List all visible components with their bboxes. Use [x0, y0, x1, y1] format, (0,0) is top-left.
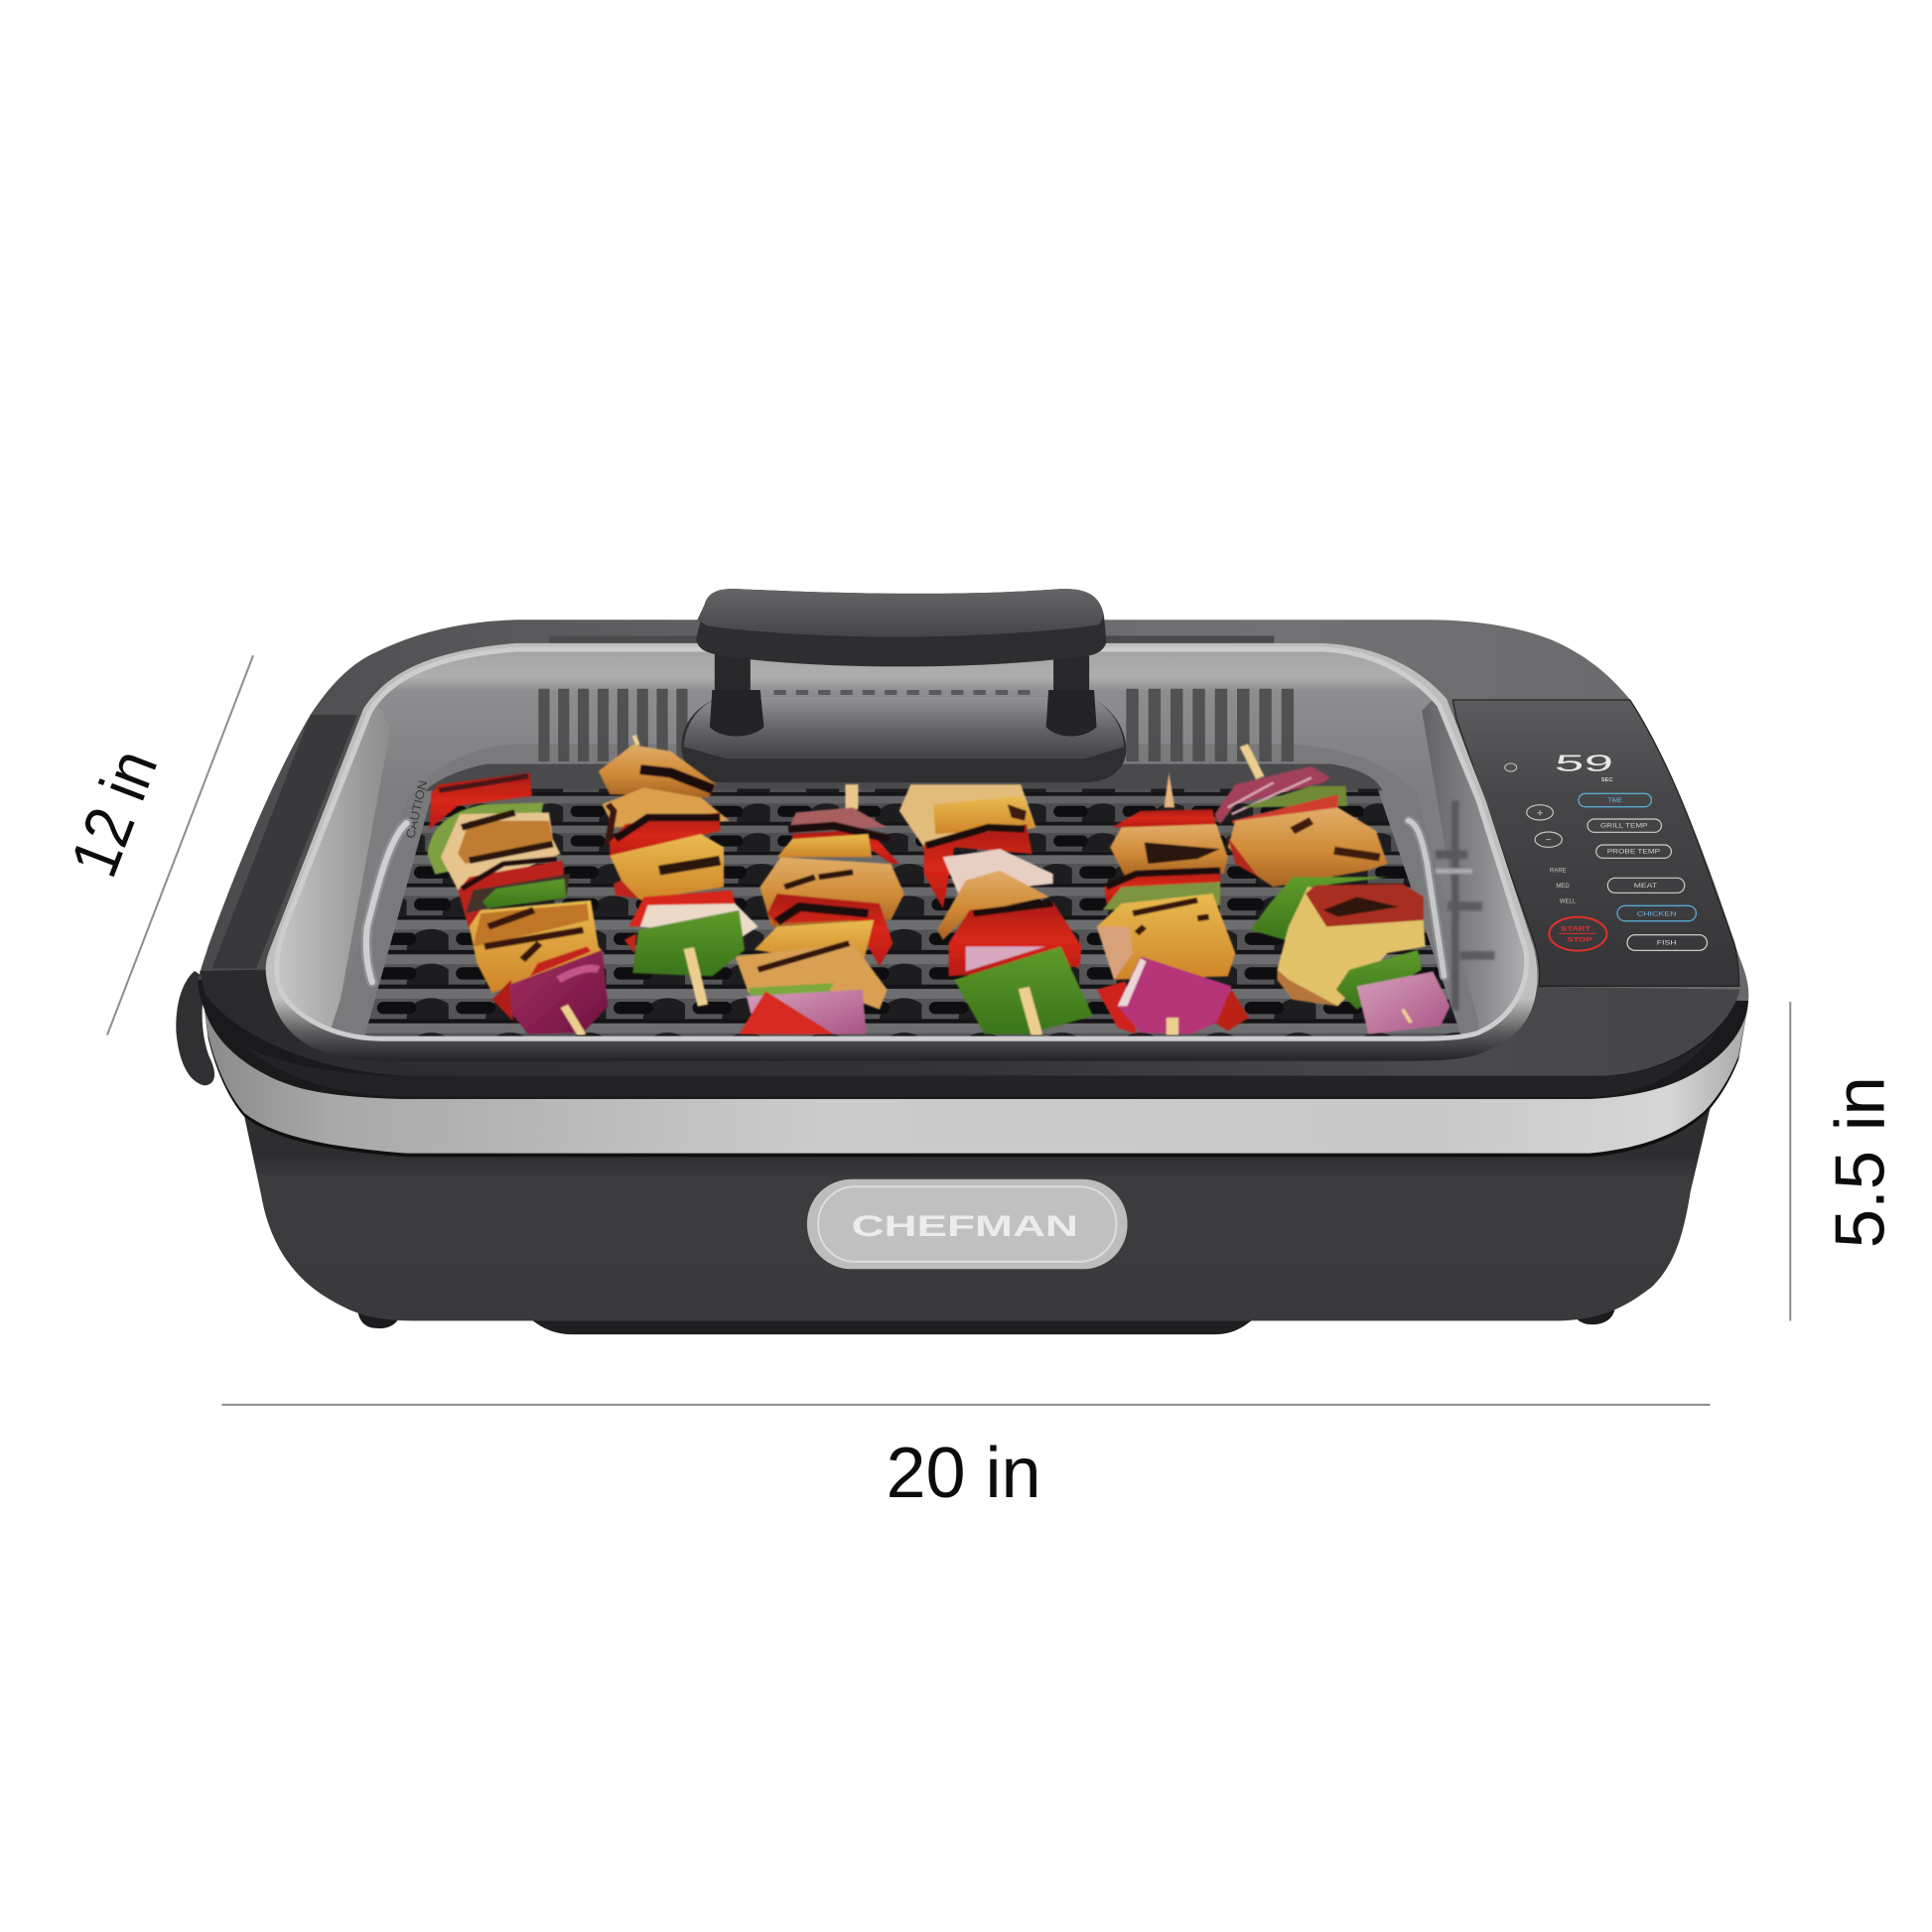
control panel: [1452, 700, 1739, 986]
glass lid outer shell: [266, 643, 1538, 1061]
probe temp button: [1596, 845, 1671, 858]
panel surface: [1452, 700, 1739, 986]
minus button: [1535, 832, 1562, 847]
timer icon: [1505, 763, 1517, 771]
doneness labels: [1550, 869, 1577, 905]
grill tray: [323, 745, 1478, 1059]
display readout: 59: [1554, 750, 1614, 775]
lid handle: [681, 589, 1126, 782]
label: depth 12 in: 12 in: [57, 740, 172, 887]
minus button: −: [1546, 835, 1552, 846]
grill temp button: [1587, 819, 1661, 832]
label: height 5.5 in: 5.5 in: [1821, 1076, 1899, 1248]
chicken button: [1617, 905, 1696, 921]
plus button: +: [1537, 807, 1544, 819]
sec label: SEC: [1601, 777, 1613, 783]
feet: [357, 1307, 1615, 1328]
side handle: [176, 971, 214, 1085]
handle posts: [710, 653, 1097, 737]
brand badge: CHEFMAN: [852, 1210, 1078, 1243]
height dimension line: [1789, 1002, 1791, 1320]
start stop button: [1549, 917, 1606, 951]
doneness labels: WELL: [1560, 899, 1577, 905]
grill temp button: GRILL TEMP: [1600, 824, 1647, 830]
left dark side panel: [211, 715, 357, 968]
left inner wall: [279, 708, 387, 1028]
doneness labels: MED: [1556, 884, 1570, 890]
infographic: grill with dimensions: [75, 589, 1884, 1497]
grill surface: [364, 788, 1473, 1036]
time button: TIME: [1608, 798, 1622, 804]
steel band: [205, 1011, 1747, 1157]
skewer 3: [736, 784, 904, 1035]
lower body: [241, 1103, 1712, 1320]
probe temp button: PROBE TEMP: [1607, 850, 1660, 856]
skewer 5: [1097, 772, 1249, 1035]
width dimension line: [221, 1404, 1711, 1406]
skewer 1: [428, 772, 608, 1035]
right inner wall: [1422, 701, 1525, 1029]
fish button: [1627, 935, 1707, 950]
grill appliance: [176, 589, 1748, 1334]
doneness labels: RARE: [1550, 869, 1567, 875]
brand badge: [807, 1179, 1128, 1269]
vent slots: [538, 689, 1294, 761]
time button: [1579, 793, 1651, 807]
skewer 2: [599, 736, 758, 1006]
meat button: [1607, 878, 1685, 893]
front deck surface: [200, 970, 1739, 1075]
tray back strip: [425, 763, 1382, 791]
handle grip: [696, 589, 1106, 666]
tray wire handles: [366, 821, 1445, 982]
start stop button: START: [1561, 926, 1590, 933]
front rim band: [246, 1033, 1716, 1097]
black rim underside: [199, 980, 1748, 1099]
parts seen through right wall: [1436, 801, 1494, 1011]
skewer 6: [1214, 746, 1450, 1035]
center slot tops behind handle: [773, 690, 1031, 695]
skewer 4: [899, 784, 1093, 1035]
drip tray: [530, 1318, 1254, 1334]
handle base plate: [681, 696, 1126, 782]
glass lid silver edge: [276, 649, 1527, 1038]
plus button: [1527, 805, 1553, 820]
label: width 20 in: 20 in: [886, 1434, 1041, 1513]
depth dimension line: [107, 655, 253, 1035]
tray caution text: CAUTION: [403, 779, 430, 840]
glass lid interior: [292, 651, 1525, 1036]
meat button: MEAT: [1634, 884, 1658, 890]
top deck: [199, 620, 1748, 1001]
fish button: FISH: [1657, 941, 1677, 947]
rear deck seam: [550, 635, 1274, 643]
start stop button: STOP: [1567, 936, 1592, 943]
chicken button: CHICKEN: [1637, 911, 1677, 917]
